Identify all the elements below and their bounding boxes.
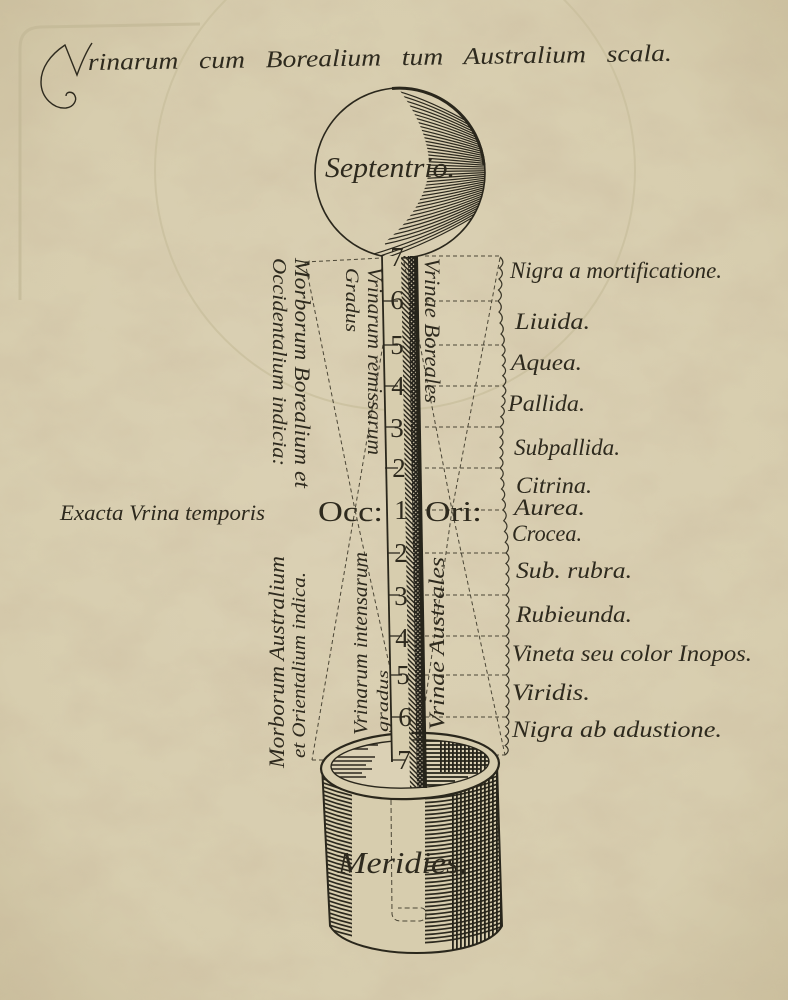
cup: Meridies bbox=[318, 730, 506, 960]
lower left vertical captions: et Orientalium indica. bbox=[289, 572, 310, 758]
Occ: Occ: bbox=[318, 497, 383, 528]
upper left vertical captions: Vrinae Boreales bbox=[420, 258, 445, 403]
column hatch band bbox=[401, 256, 418, 788]
curly bracket bbox=[498, 257, 509, 755]
scale numerals: 7 bbox=[390, 242, 404, 272]
scale numerals: 4 bbox=[391, 371, 405, 401]
title bbox=[41, 41, 672, 108]
cup body bbox=[322, 765, 502, 953]
scale numerals: 5 bbox=[396, 660, 410, 690]
upper left vertical captions: Vrinarum remissarum bbox=[363, 267, 387, 455]
colour scale labels: Citrina. bbox=[516, 473, 592, 498]
faint plate edge bbox=[20, 24, 200, 300]
title flourish V bbox=[41, 43, 92, 108]
column dark band bbox=[414, 256, 427, 788]
colour scale labels: Crocea. bbox=[512, 521, 582, 546]
scale numerals: 4 bbox=[395, 623, 409, 653]
colour scale labels: Sub. rubra. bbox=[516, 558, 632, 583]
upper left vertical captions: Morborum Borealium et bbox=[290, 257, 315, 489]
cup rim bbox=[320, 730, 500, 802]
left caption: Exacta Vrina temporis bbox=[59, 500, 265, 525]
Ori: Ori: bbox=[425, 497, 482, 528]
scale numerals: 7 bbox=[397, 745, 411, 775]
right dashed level lines bbox=[425, 256, 506, 755]
west and east labels bbox=[318, 497, 482, 528]
colour scale labels: Subpallida. bbox=[514, 435, 620, 460]
column dotted band bbox=[408, 256, 425, 788]
colour scale labels: Nigra a mortificatione. bbox=[509, 258, 722, 283]
sphere outline bbox=[315, 88, 485, 258]
scale numerals: 3 bbox=[390, 413, 404, 443]
column body bbox=[382, 256, 412, 760]
colour scale labels: Rubieunda. bbox=[515, 602, 632, 627]
dotted trapezoid guides bbox=[305, 258, 505, 760]
lower left vertical captions: Vrinae Australes bbox=[424, 557, 449, 730]
faint show-through circle bbox=[155, 0, 635, 410]
upper left vertical captions bbox=[268, 257, 445, 489]
lower left vertical captions bbox=[264, 552, 449, 769]
scale numerals: 1 bbox=[394, 495, 408, 525]
colour scale labels: Nigra ab adustione. bbox=[511, 717, 722, 742]
scale numerals: 5 bbox=[390, 330, 404, 360]
scale numerals bbox=[390, 242, 412, 775]
upper left vertical captions: Occidentalium indicia: bbox=[268, 258, 290, 466]
sphere: Septentrio bbox=[315, 88, 490, 266]
lower left vertical captions: Morborum Australium bbox=[264, 556, 289, 769]
lower left vertical captions: Vrinarum intensarum bbox=[350, 552, 372, 735]
colour scale labels: Viridis. bbox=[512, 680, 590, 705]
column left line bbox=[382, 256, 392, 762]
ticks bbox=[383, 301, 405, 760]
colour scale labels: Vineta seu color Inopos. bbox=[512, 641, 752, 666]
scale numerals: 3 bbox=[394, 581, 408, 611]
upper left vertical captions: Gradus bbox=[341, 268, 362, 332]
scale numerals: 2 bbox=[394, 538, 408, 568]
sphere label: Septentrio. bbox=[325, 152, 455, 184]
title: rinarum cum Borealium tum Australium scala. bbox=[88, 41, 672, 76]
colour scale labels: Liuida. bbox=[514, 309, 590, 334]
graduated column bbox=[382, 242, 427, 788]
colour scale labels: Aquea. bbox=[509, 350, 582, 375]
cup cross hatch bbox=[452, 773, 501, 950]
lower left vertical captions: gradus bbox=[375, 670, 392, 732]
cup inner shading bbox=[328, 738, 493, 785]
scale numerals: 6 bbox=[390, 285, 404, 315]
colour scale labels: Pallida. bbox=[507, 391, 585, 416]
sphere hatching bbox=[374, 91, 484, 256]
scale numerals: 6 bbox=[398, 702, 412, 732]
cup body curved hatching bbox=[324, 773, 501, 950]
colour scale labels: Aurea. bbox=[512, 495, 585, 520]
cup label: Meridies. bbox=[337, 845, 468, 880]
scale numerals: 2 bbox=[392, 453, 406, 483]
colour scale labels bbox=[507, 258, 752, 742]
hidden stem in cup bbox=[391, 800, 426, 921]
